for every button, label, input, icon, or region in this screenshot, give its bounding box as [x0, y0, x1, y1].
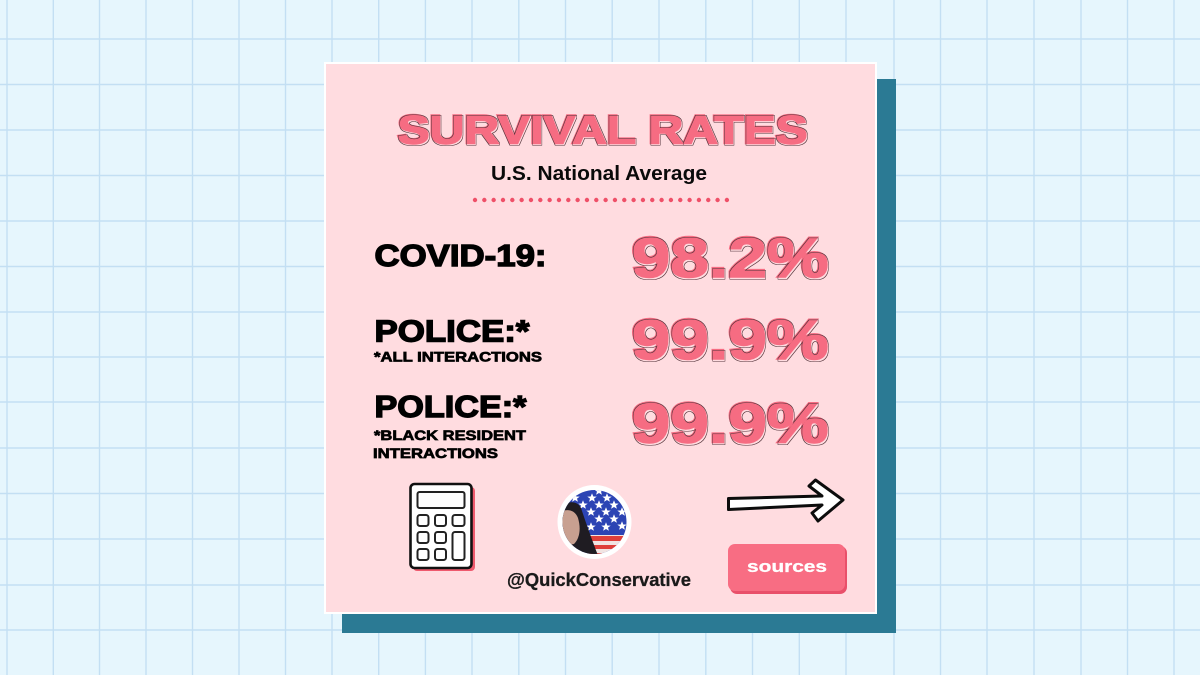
title: SURVIVAL RATES	[397, 108, 807, 152]
subtitle: U.S. National Average	[491, 163, 707, 185]
row: police black resident label: INTERACTIONS	[373, 445, 498, 461]
row: police black resident label: POLICE:*	[374, 389, 528, 424]
row: police all value: 99.9%	[632, 309, 829, 373]
title: SURVIVAL RATES	[398, 109, 808, 153]
icon: hand-drawn arrow	[728, 480, 843, 521]
row: police all label: POLICE:*	[374, 314, 531, 348]
row: police black resident label	[373, 389, 528, 461]
panel: pink card	[325, 63, 876, 613]
row: police all label	[374, 314, 542, 364]
row: police black resident value: 99.9%	[631, 391, 828, 455]
row: police all label: *ALL INTERACTIONS	[374, 348, 542, 364]
row: police black resident value: 99.9%	[632, 392, 829, 456]
teal card shadow	[342, 79, 896, 633]
row: COVID-19 label: COVID-19:	[374, 238, 546, 273]
row: COVID-19 value: 98.2%	[631, 226, 828, 290]
dotted divider	[475, 198, 727, 202]
icon: profile avatar with flag	[558, 485, 632, 559]
handle: @QuickConservative	[507, 569, 691, 590]
row: police all value: 99.9%	[631, 308, 828, 372]
row: police black resident label: *BLACK RESIDENT	[374, 427, 527, 443]
button: sources: sources	[747, 558, 827, 576]
row: COVID-19 value: 98.2%	[632, 227, 829, 291]
button: sources	[728, 544, 847, 594]
icon: calculator	[410, 484, 475, 571]
